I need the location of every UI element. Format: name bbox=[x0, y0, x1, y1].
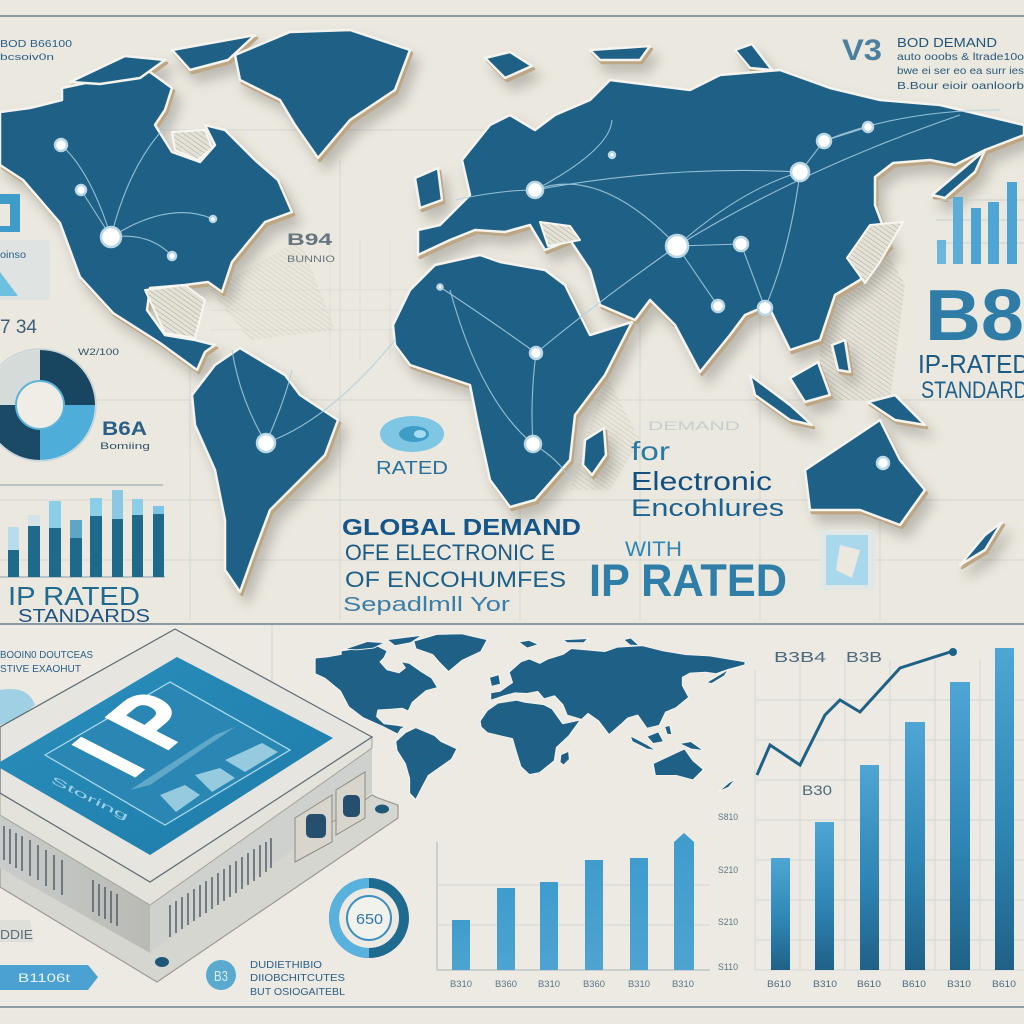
main title right: for bbox=[631, 436, 670, 466]
left note above device: STIVE EXAOHUT bbox=[0, 664, 81, 675]
left chart caption: IP RATED bbox=[8, 581, 140, 611]
continents bbox=[0, 30, 1024, 592]
left stat: 7 34 bbox=[0, 317, 37, 338]
center bar chart: B310 bbox=[672, 979, 694, 989]
small swirl icon bbox=[0, 689, 35, 725]
left chart caption: STANDARDS bbox=[18, 606, 150, 626]
right stat B8 with IP-rated standards bbox=[918, 276, 1024, 404]
center bar chart: B310 bbox=[628, 979, 650, 989]
top right stat and note: V3 bbox=[842, 34, 882, 67]
donut chart bbox=[0, 349, 96, 461]
center bar chart: B360 bbox=[583, 979, 605, 989]
main title left: Sepadlmll Yor bbox=[343, 594, 510, 616]
left small icon: DDIE bbox=[0, 927, 33, 942]
right stat B8 with IP-rated standards: B8 bbox=[925, 276, 1024, 356]
bottom note: BUT OSIOGAITEBL bbox=[250, 987, 345, 998]
main title left: OF ENCOHUMFES bbox=[345, 567, 566, 592]
main title right bbox=[589, 436, 787, 606]
lid lip bbox=[0, 737, 372, 905]
screw holes bbox=[155, 804, 389, 967]
main title left: GLOBAL DEMAND bbox=[342, 514, 581, 540]
ports bbox=[295, 772, 365, 862]
top right stat and note bbox=[842, 34, 1024, 92]
top right stat and note: auto ooobs & ltrade10o bbox=[897, 52, 1024, 63]
right bar chart bbox=[936, 182, 1024, 264]
hatched inland seas and Japan bbox=[145, 130, 903, 338]
bottom note: DUDIETHIBIO bbox=[250, 960, 322, 971]
left small icons bbox=[0, 194, 50, 300]
right large bar chart bbox=[755, 648, 1024, 989]
small world map bbox=[315, 634, 745, 800]
top left note: BOD B66100 bbox=[0, 39, 73, 50]
main title right: WITH bbox=[625, 538, 682, 561]
chart labels bbox=[767, 649, 1016, 989]
world map with connection network bbox=[0, 30, 1024, 592]
top left note bbox=[0, 39, 73, 62]
central small stat bbox=[287, 230, 335, 264]
chart labels: B30 bbox=[802, 782, 832, 798]
donut labels: W2/100 bbox=[78, 347, 119, 357]
small round icon: B3 bbox=[214, 968, 228, 985]
donut labels bbox=[78, 347, 150, 451]
ring gauge: 650 bbox=[356, 911, 383, 928]
network nodes bbox=[55, 122, 889, 469]
center bar chart: S210 bbox=[718, 865, 738, 875]
donut labels: Bomiing bbox=[100, 441, 150, 451]
central small stat: BUNNIO bbox=[287, 254, 335, 264]
right vents bbox=[170, 838, 271, 937]
chart labels: B610 bbox=[902, 979, 926, 989]
bottom note: DIIOBCHITCUTES bbox=[250, 973, 345, 984]
center bar chart: B360 bbox=[495, 979, 517, 989]
ring gauge bbox=[334, 883, 404, 953]
frame bbox=[0, 629, 372, 882]
top right stat and note: BOD DEMAND bbox=[897, 35, 997, 50]
chart labels: B610 bbox=[992, 979, 1016, 989]
IP letters: IP bbox=[50, 664, 241, 790]
base plate bbox=[0, 795, 398, 982]
connection lines bbox=[61, 110, 1000, 480]
small round icon bbox=[206, 960, 236, 990]
chart labels: B610 bbox=[767, 979, 791, 989]
main title left: OFE ELECTRONIC E bbox=[345, 540, 555, 565]
screen bbox=[0, 657, 333, 855]
faint label: DEMAND bbox=[648, 419, 741, 433]
main title right: IP RATED bbox=[589, 555, 787, 606]
chart labels: B610 bbox=[857, 979, 881, 989]
left vents bbox=[4, 826, 117, 926]
chart labels: B3B4 bbox=[774, 649, 826, 666]
trend line bbox=[757, 648, 957, 775]
center bar chart: B310 bbox=[450, 979, 472, 989]
main title right: Electronic bbox=[631, 466, 772, 496]
left small icon bbox=[0, 920, 34, 942]
rated icon and label: RATED bbox=[376, 458, 448, 478]
screen inset panel bbox=[45, 682, 290, 825]
left side bbox=[0, 795, 150, 953]
top right stat and note: B.Bour eioir oanloorb bbox=[897, 81, 1024, 92]
chart labels: B3B bbox=[846, 649, 882, 666]
IP enclosure device bbox=[0, 629, 398, 982]
chart labels: B310 bbox=[813, 979, 837, 989]
chart labels: B310 bbox=[947, 979, 971, 989]
right side bbox=[150, 740, 372, 953]
left stacked bar chart bbox=[0, 485, 165, 577]
hatched coastal shadows bbox=[210, 240, 905, 490]
top left note: bcsoiv0n bbox=[0, 52, 54, 62]
center bar chart: S810 bbox=[718, 812, 738, 822]
central small stat: B94 bbox=[287, 230, 333, 249]
bottom note bbox=[250, 960, 345, 998]
ribbon label bbox=[0, 965, 98, 990]
left note above device: BOOIN0 DOUTCEAS bbox=[0, 650, 93, 661]
center bar chart bbox=[437, 812, 738, 989]
rated icon and label bbox=[376, 416, 448, 478]
center bar chart: S210 bbox=[718, 917, 738, 927]
donut labels: B6A bbox=[102, 419, 147, 440]
left small icons: oinso bbox=[0, 250, 26, 261]
center bar chart: S110 bbox=[718, 962, 738, 972]
left chart caption bbox=[8, 581, 150, 626]
center bar chart: B310 bbox=[538, 979, 560, 989]
screen small caption: Storing bbox=[49, 775, 130, 823]
main title right: Encohlures bbox=[631, 495, 784, 522]
main title left bbox=[342, 514, 581, 616]
australia side icon bbox=[820, 530, 875, 590]
ribbon label: B1106t bbox=[18, 971, 71, 985]
left note above device bbox=[0, 650, 93, 675]
top right stat and note: bwe ei ser eo ea surr ies bbox=[897, 66, 1024, 77]
screen detail tiles bbox=[130, 727, 278, 812]
